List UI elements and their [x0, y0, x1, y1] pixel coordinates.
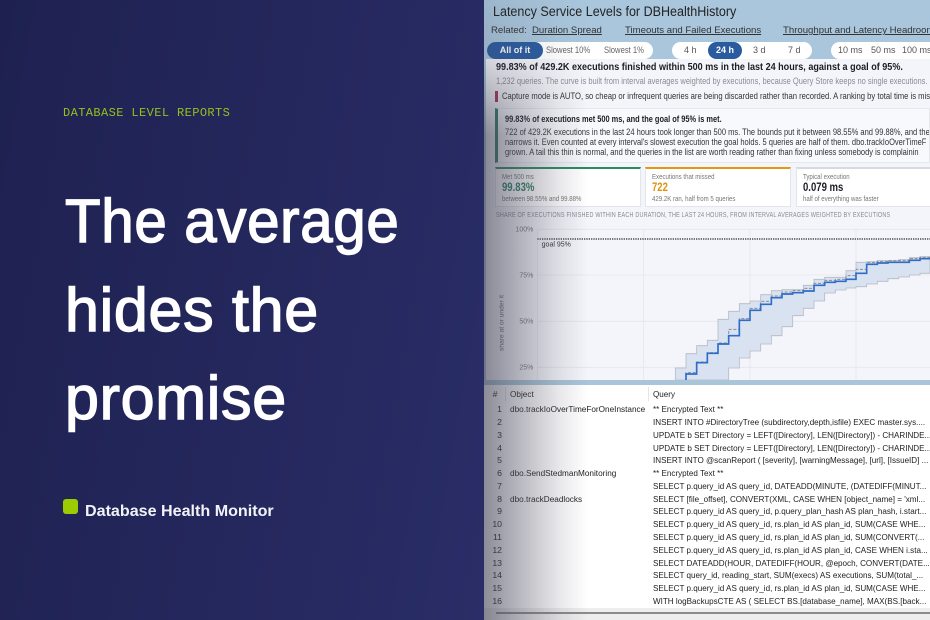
callout heading: 99.83% of executions met 500 ms, and the goal of 95% is met. [505, 114, 722, 124]
stat note: half of everything was faster [803, 194, 879, 203]
table row 5 [497, 455, 928, 465]
stat label: Met 500 ms [502, 172, 534, 181]
related links [491, 25, 930, 36]
y axis labels: 50% [519, 319, 533, 326]
table row 12: SELECT p.query_id AS query_id, rs.plan_id AS plan_id, CASE WHEN i.sta... [653, 545, 928, 555]
related links: Throughput and Latency Headroom [783, 25, 930, 36]
panel: report screenshot [484, 0, 930, 620]
table row 1: dbo.trackIoOverTimeForOneInstance [510, 404, 645, 414]
table row 12 [492, 545, 928, 555]
table row 9: 9 [497, 506, 502, 516]
sub note: 1,232 queries. The curve is built from interval averages weighted by executions, because Query Store keeps no single executions. [496, 76, 927, 86]
stat card: met 500 ms [495, 167, 641, 207]
table header [492, 387, 675, 401]
pills: time window [672, 42, 812, 59]
table row 2 [497, 417, 925, 427]
table row 14 [492, 570, 923, 580]
table row 14: 14 [492, 570, 502, 580]
table row 5: INSERT INTO @scanReport ( [severity], [warningMessage], [url], [IssueID] ... [653, 455, 928, 465]
table row 7: SELECT p.query_id AS query_id, DATEADD(MINUTE, (DATEDIFF(MINUT... [653, 481, 926, 491]
pill: 24 h selected: 24 h [716, 45, 734, 55]
table row 8: 8 [497, 494, 502, 504]
table row 15: 15 [492, 583, 502, 593]
pills: percentile scope: Slowest 1% [604, 45, 644, 55]
related links: Timeouts and Failed Executions [625, 25, 761, 36]
y axis labels: 100% [515, 226, 533, 233]
table row 16: WITH logBackupsCTE AS ( SELECT BS.[database_name], MAX(BS.[back... [653, 596, 926, 606]
table row 12: 12 [492, 545, 502, 555]
pills: time window: 3 d [753, 45, 766, 55]
stat value: 722 [652, 182, 668, 194]
table row 16: 16 [492, 596, 502, 606]
scrollbar [484, 608, 930, 620]
table row 6: dbo.SendStedmanMonitoring [510, 468, 616, 478]
table header: # [493, 389, 497, 399]
report title: Latency Service Levels for DBHealthHistory [493, 4, 736, 20]
table row 6: 6 [497, 468, 502, 478]
report header band [484, 0, 930, 59]
stat note: between 98.55% and 99.88% [502, 194, 581, 203]
table row 8 [497, 494, 925, 504]
table row 15 [492, 583, 925, 593]
table row 1 [497, 404, 724, 414]
title: promise [65, 364, 287, 432]
icon: brand square [63, 499, 78, 514]
splitter [484, 380, 930, 385]
table header: Query [653, 389, 675, 399]
table row 6 [497, 468, 724, 478]
stat label: Executions that missed [652, 172, 714, 181]
pills: percentile scope [487, 42, 653, 59]
table row 4 [497, 442, 930, 452]
table row 4: 4 [497, 442, 502, 452]
eyebrow label: DATABASE LEVEL REPORTS [63, 106, 230, 120]
pills: duration goal: 50 ms [871, 45, 896, 55]
table row 8: dbo.trackDeadlocks [510, 494, 582, 504]
goal label: goal 95% [542, 242, 571, 249]
headline sentence: 99.83% of 429.2K executions finished within 500 ms in the last 24 hours, against a goal of 95%. [496, 62, 903, 73]
pill: all of it selected: All of it [500, 45, 530, 55]
table row 11: SELECT p.query_id AS query_id, rs.plan_id AS plan_id, SUM(CONVERT(... [653, 532, 924, 542]
alert marker [495, 91, 498, 102]
table row 5: 5 [497, 455, 502, 465]
stat label: Typical execution [803, 172, 850, 181]
pills: time window: 7 d [788, 45, 801, 55]
step chart: share of executions within duration [498, 226, 930, 380]
table row 2: 2 [497, 417, 502, 427]
stat value: 0.079 ms [803, 182, 843, 194]
callout body [505, 127, 930, 157]
stat card: executions that missed [645, 167, 791, 207]
pills: time window: 4 h [684, 45, 697, 55]
table row 13 [492, 558, 930, 568]
table row 3: 3 [497, 430, 502, 440]
panel: title side [0, 0, 484, 620]
fade overlay on screenshot edge [484, 0, 588, 620]
table row 3 [497, 430, 930, 440]
alert text: Capture mode is AUTO, so cheap or infrequent queries are being discarded rather than recorded. A ranking by total time is mis [502, 91, 930, 101]
window frame edge [484, 59, 486, 380]
table row 10 [492, 519, 925, 529]
stat note: 429.2K ran, half from 5 queries [652, 194, 735, 203]
callout: goal met [495, 108, 930, 163]
table row 8: SELECT [file_offset], CONVERT(XML, CASE WHEN [object_name] = 'xml... [653, 494, 925, 504]
goal line [537, 236, 930, 242]
table row 4: UPDATE b SET Directory = LEFT([Directory], LEN([Directory]) - CHARINDE... [653, 442, 930, 452]
table row 15: SELECT p.query_id AS query_id, rs.plan_id AS plan_id, SUM(CASE WHE... [653, 583, 925, 593]
callout body: 722 of 429.2K executions in the last 24 hours took longer than 500 ms. The bounds put it between 98.55% and 99.88%, and the [505, 127, 930, 137]
title: hides the [65, 276, 319, 344]
main curve [686, 259, 930, 380]
query table [484, 385, 930, 620]
callout body: grown. A tail this thin is normal, and the queries in the list are worth reading rather than fixing unless somebody is complainin [505, 147, 919, 157]
table row 9 [497, 506, 926, 516]
y axis labels: 25% [519, 365, 533, 372]
table row 14: SELECT query_id, reading_start, SUM(execs) AS executions, SUM(total_... [653, 570, 923, 580]
pills: duration goal: 10 ms [838, 45, 863, 55]
pill: 24 h selected [708, 42, 742, 59]
table row 2: INSERT INTO #DirectoryTree (subdirectory,depth,isfile) EXEC master.sys.... [653, 417, 925, 427]
pills: duration goal [831, 42, 930, 59]
title [65, 187, 399, 432]
y axis labels: 75% [519, 272, 533, 279]
table row 7: 7 [497, 481, 502, 491]
y axis labels [515, 226, 533, 372]
table row 1: ** Encrypted Text ** [653, 404, 723, 414]
table row 13: SELECT DATEADD(HOUR, DATEDIFF(HOUR, @epoch, CONVERT(DATE... [653, 558, 930, 568]
table row 11: 11 [493, 532, 502, 542]
table row 9: SELECT p.query_id AS query_id, p.query_plan_hash AS plan_hash, i.start... [653, 506, 926, 516]
table row 1: 1 [497, 404, 502, 414]
table row 10: SELECT p.query_id AS query_id, rs.plan_id AS plan_id, SUM(CASE WHE... [653, 519, 925, 529]
pill: all of it selected [487, 42, 543, 59]
table row 10: 10 [492, 519, 502, 529]
stat card: typical execution [796, 167, 930, 207]
alert: capture mode [495, 91, 930, 102]
brand name: Database Health Monitor [85, 502, 274, 520]
callout body: narrows it. Even counted at every interval's slowest execution the goal holds. 5 queries are half of them. dbo.trackIoOverTimeF [505, 137, 926, 147]
stat value: 99.83% [502, 182, 534, 194]
table row 6: ** Encrypted Text ** [653, 468, 723, 478]
table row 3: UPDATE b SET Directory = LEFT([Directory], LEN([Directory]) - CHARINDE... [653, 430, 930, 440]
interval worst-case dashed curve [686, 257, 930, 380]
related links: Related: [491, 25, 527, 36]
table row 11 [493, 532, 924, 542]
related links: Duration Spread [532, 25, 602, 36]
bounds band [675, 257, 930, 380]
chart title: SHARE OF EXECUTIONS FINISHED WITHIN EACH DURATION, THE LAST 24 HOURS, FROM INTERVAL AVERAGES WEIGHTED BY EXECUTIONS [496, 212, 890, 219]
table row 16 [492, 596, 926, 606]
title: The average [65, 187, 399, 255]
pills: percentile scope: Slowest 10% [546, 45, 590, 55]
y axis title: share at or under it [498, 295, 505, 351]
table header: Object [510, 389, 534, 399]
table row 7 [497, 481, 926, 491]
table row 13: 13 [492, 558, 502, 568]
